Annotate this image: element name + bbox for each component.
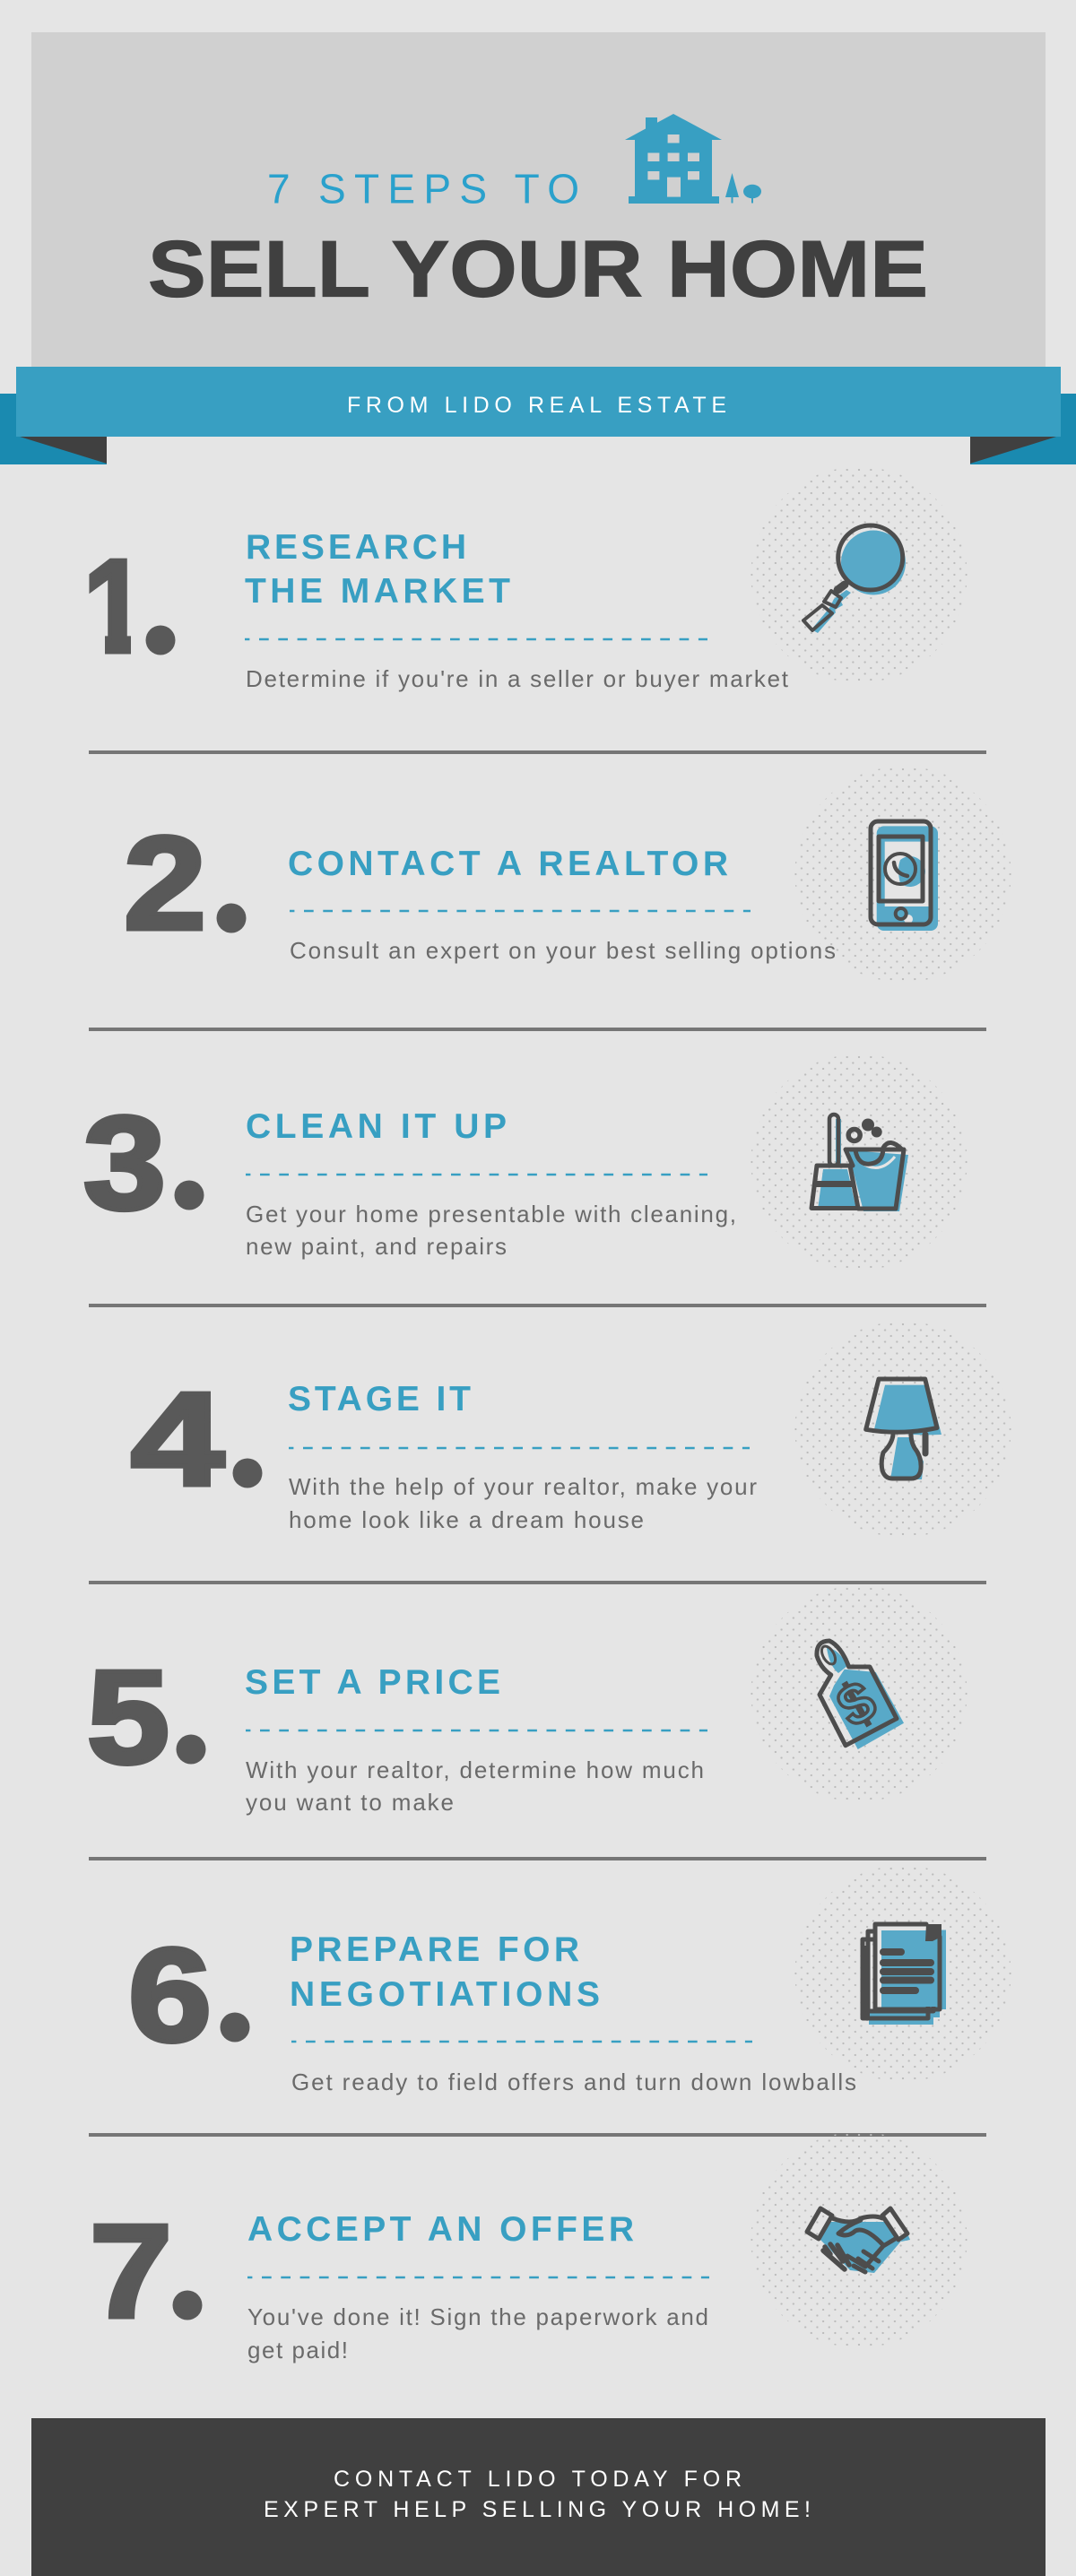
heading: ACCEPT AN OFFER [247,2210,634,2249]
number 2 [124,810,246,958]
description [246,1201,736,1260]
description: Determine if you're in a seller or buyer market [246,665,789,692]
number 5: . [187,1722,196,1761]
icon: handshake on dotted circle [751,2132,967,2347]
number 2: . [227,890,237,930]
heading: THE MARKET [245,572,510,611]
footer text: EXPERT HELP SELLING YOUR HOME! [264,2497,811,2522]
panel: step 3 [83,1054,967,1270]
number 4 [131,1366,262,1514]
description [247,2303,708,2364]
number 6: . [230,1999,240,2039]
subtitle: 7 steps to: 7 STEPS TO [267,165,579,212]
panel: step 7 [90,2132,967,2364]
heading [290,1930,600,2014]
heading: PREPARE FOR [290,1930,579,1969]
panel: step 5 [87,1585,967,1816]
number 3: . [185,1167,195,1207]
number 3 [83,1089,204,1237]
panel: step 6 [128,1865,1011,2095]
description [289,1473,757,1533]
icon: price tag on dotted circle [751,1585,967,1802]
icon: price tag on dotted circle: $ [827,1668,886,1739]
number 2: 2 [124,810,206,958]
heading: STAGE IT [288,1380,471,1418]
panel: step 4 [131,1322,1011,1537]
number 7 [90,2198,203,2346]
description: With your realtor, determine how much [246,1756,704,1783]
description: Get your home presentable with cleaning, [246,1201,736,1227]
number 3: 3 [83,1089,166,1237]
heading: RESEARCH [246,528,466,567]
heading [245,528,510,611]
description [246,1756,704,1816]
title: SELL YOUR HOME [148,224,928,314]
panel: step 2 [124,766,1011,983]
description: home look like a dream house [289,1506,644,1533]
icon: phone on dotted circle [794,766,1011,983]
icon: broom and bucket on dotted circle [751,1054,967,1270]
number 6 [128,1921,249,2069]
description: Consult an expert on your best selling options [290,937,836,964]
number 5 [87,1644,206,1791]
footer text [264,2467,811,2522]
heading: CONTACT A REALTOR [288,845,728,883]
description: You've done it! Sign the paperwork and [247,2303,708,2330]
number 1: . [156,612,166,652]
footer panel [31,2418,1046,2576]
divider lines [89,750,986,2137]
number 4: . [243,1445,253,1485]
description: Get ready to field offers and turn down lowballs [291,2069,856,2095]
number 1: 1 [83,533,146,681]
panel: step 1 [76,466,967,692]
ribbon text: FROM LIDO REAL ESTATE [347,393,726,418]
description: get paid! [247,2337,348,2364]
footer text: CONTACT LIDO TODAY FOR [334,2467,742,2492]
number 7: 7 [90,2198,172,2346]
ribbon banner [0,367,1076,464]
heading: NEGOTIATIONS [290,1975,600,2014]
number 7: . [183,2277,193,2317]
description: new paint, and repairs [246,1233,507,1260]
number 5: 5 [87,1644,169,1791]
icon: stack of documents on dotted circle [794,1865,1011,2082]
header panel [31,32,1046,368]
heading: CLEAN IT UP [246,1107,507,1146]
icon: house with trees [625,114,761,204]
description: you want to make [246,1789,454,1816]
number 4: 4 [131,1366,224,1514]
icon: magnifying glass on dotted circle [751,466,967,683]
icon: table lamp on dotted circle [794,1322,1011,1537]
heading: SET A PRICE [245,1663,500,1702]
description: With the help of your realtor, make your [289,1473,757,1500]
number 6: 6 [128,1921,212,2069]
